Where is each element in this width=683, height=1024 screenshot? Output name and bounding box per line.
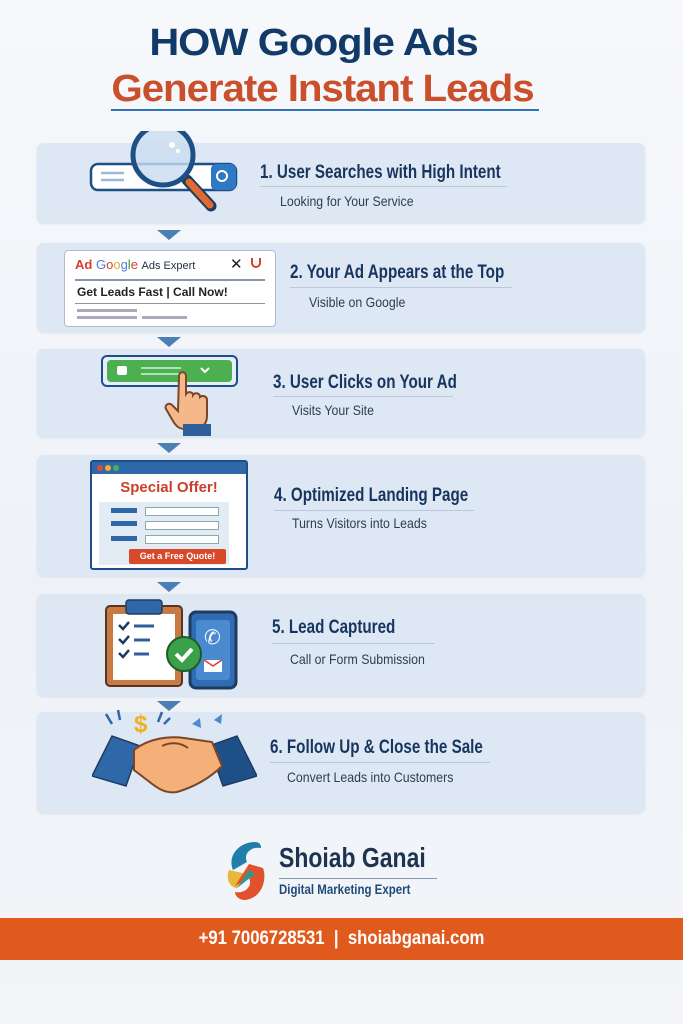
panel: step 5	[37, 594, 645, 696]
icon: search bar with magnifier	[90, 131, 238, 212]
step 5 subtitle: Call or Form Submission	[290, 651, 425, 667]
brand name: Shoiab Ganai	[279, 842, 426, 873]
step 2 subtitle: Visible on Google	[309, 294, 405, 310]
arrow	[157, 582, 181, 592]
icon: google ad card: Ad Google Ads Expert	[75, 257, 195, 272]
step 1 subtitle: Looking for Your Service	[280, 193, 414, 209]
title	[111, 22, 534, 110]
contact text: +91 7006728531 | shoiabganai.com	[199, 928, 484, 949]
step 5 title: 5. Lead Captured	[272, 617, 395, 638]
panel: step 1	[37, 143, 645, 223]
icon: landing page: Get a Free Quote!	[140, 551, 215, 561]
icon: google ad card	[64, 250, 276, 327]
icon: handshake	[92, 710, 257, 794]
step 3 subtitle: Visits Your Site	[292, 402, 374, 418]
icon: handshake: $	[134, 711, 148, 738]
step 6 subtitle: Convert Leads into Customers	[287, 769, 453, 785]
icon: landing page: Special Offer!	[120, 479, 218, 496]
tagline: Digital Marketing Expert	[279, 881, 410, 897]
icon: google ad card: ✕	[230, 256, 243, 273]
panel: step 3	[37, 349, 645, 437]
panel: step 6	[37, 712, 645, 813]
arrow	[157, 443, 181, 453]
title line 2: Generate Instant Leads	[111, 68, 534, 110]
arrow	[157, 337, 181, 347]
logo	[228, 842, 437, 900]
arrow	[157, 230, 181, 240]
panel: step 4	[37, 455, 645, 576]
step 6 title: 6. Follow Up & Close the Sale	[270, 737, 483, 758]
step 4 subtitle: Turns Visitors into Leads	[292, 515, 427, 531]
icon: click button with hand	[101, 355, 238, 436]
arrow	[157, 701, 181, 711]
icon: google ad card: Get Leads Fast | Call Now!	[77, 285, 228, 299]
panel: step 2	[37, 243, 645, 332]
icon: S logo	[228, 842, 264, 900]
icon: clipboard and phone	[105, 599, 238, 690]
step 4 title: 4. Optimized Landing Page	[274, 485, 468, 506]
footer bar	[0, 918, 683, 960]
step 1 title: 1. User Searches with High Intent	[260, 162, 501, 183]
step 2 title: 2. Your Ad Appears at the Top	[290, 262, 504, 283]
step 3 title: 3. User Clicks on Your Ad	[273, 372, 457, 393]
icon: landing page	[90, 460, 248, 570]
title line 1: HOW Google Ads	[149, 22, 478, 64]
icon: clipboard and phone: ✆	[204, 625, 221, 649]
